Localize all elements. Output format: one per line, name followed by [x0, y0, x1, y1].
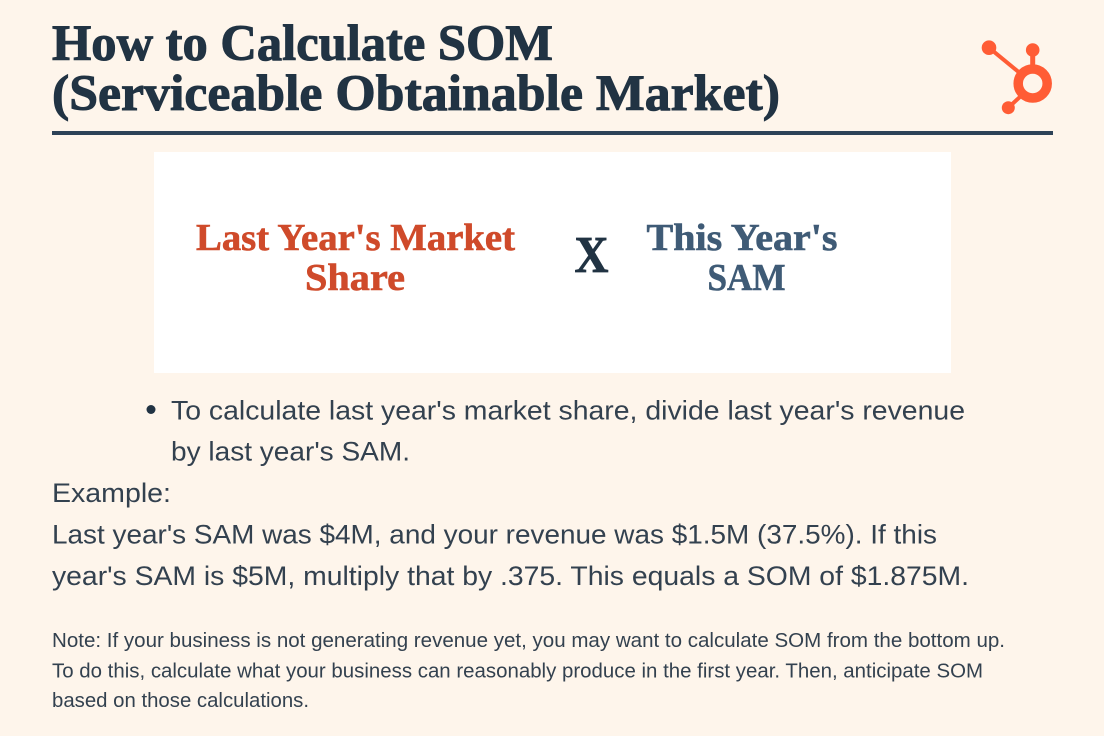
formula term: this year's SAM: This Year's — [646, 217, 838, 259]
note text: Note: If your business is not generating revenue yet, you may want to calculate SOM from the bottom up. — [52, 630, 1005, 652]
bullet: market share instruction — [146, 396, 965, 466]
bullet: market share instruction: To calculate last year's market share, divide last year's revenue — [171, 396, 965, 426]
formula term: last year's market share: Last Year's Market — [196, 217, 515, 259]
panel: formula — [154, 152, 951, 373]
example text: year's SAM is $5M, multiply that by .375. This equals a SOM of $1.875M. — [52, 561, 969, 591]
formula term: this year's SAM — [646, 217, 838, 299]
formula term: last year's market share: Share — [305, 257, 405, 299]
example text — [52, 478, 969, 591]
bullet: market share instruction: by last year's SAM. — [171, 436, 410, 466]
title divider — [52, 131, 1053, 135]
formula term: last year's market share — [196, 217, 515, 299]
formula term: this year's SAM: SAM — [708, 257, 786, 299]
icon: HubSpot logo — [982, 40, 1047, 114]
formula multiply sign: X — [574, 227, 608, 284]
example text: Example: — [52, 478, 171, 508]
title — [52, 16, 780, 122]
note text: To do this, calculate what your business can reasonably produce in the first year. Then, anticipate SOM — [52, 660, 983, 682]
note text — [52, 630, 1005, 712]
title: (Serviceable Obtainable Market) — [52, 66, 780, 122]
example text: Last year's SAM was $4M, and your revenue was $1.5M (37.5%). If this — [52, 520, 937, 550]
note text: based on those calculations. — [52, 690, 309, 712]
title: How to Calculate SOM — [52, 16, 553, 72]
